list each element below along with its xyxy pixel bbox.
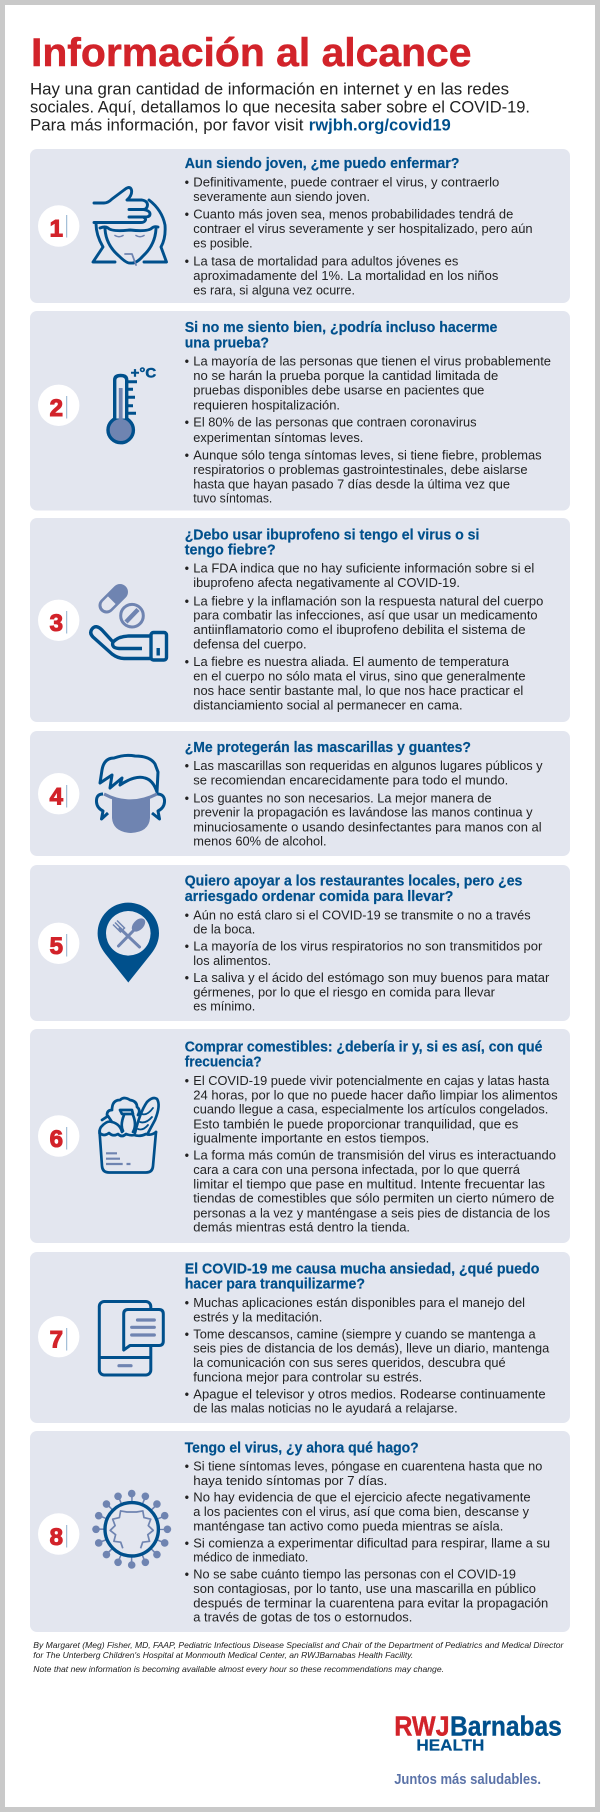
bullet list 8: • [185,1567,189,1581]
panel: card 1 young people [30,149,570,303]
bullet list 6: limitar el tiempo que pase en multitud. Intente frecuentar las [193,1177,545,1191]
bullet list 6: Esto también le puede proporcionar tranquilidad, que es [193,1117,518,1131]
bullet list 3: • [185,655,189,669]
bullet list 1: es rara, si alguna vez ocurre. [193,284,355,298]
heading 6 [185,1039,542,1071]
icon: thermometer: +°C [131,365,156,380]
bullet list 6: cara a cara con una persona infectada, por lo que querrá [193,1163,520,1177]
title: Información al alcance [31,31,472,75]
bullet list 2: pruebas disponibles debe usarse en pacientes que [193,384,484,398]
bullet list 2 [185,354,551,506]
heading 1: Aun siendo joven, ¿me puedo enfermar? [185,156,459,172]
number badge 4 [38,773,79,814]
bullet list 6: 24 horas, por lo que no puede hacer daño limpiar los alimentos [193,1088,558,1102]
intro text block [30,79,530,134]
footnote credits: Note that new information is becoming available almost every hour so these recommendations may change. [33,1664,444,1674]
heading 5: Quiero apoyar a los restaurantes locales, pero ¿es [185,874,522,890]
panel: card 4 masks and gloves [30,731,570,856]
bullet list 5: La mayoría de los virus respiratorios no son transmitidos por [193,940,542,954]
bullet list 4: Las mascarillas son requeridas en algunos lugares públicos y [193,759,543,773]
bullet list 2: tuvo síntomas. [193,492,272,506]
bullet list 8: Si tiene síntomas leves, póngase en cuarentena hasta que no [193,1460,542,1474]
bullet list 5: La saliva y el ácido del estómago son muy buenos para matar [193,971,549,985]
heading 5: arriesgado ordenar comida para llevar? [185,889,453,905]
bullet list 8: a través de gotas de tos o estornudos. [193,1611,412,1625]
bullet list 2: no se harán la prueba porque la cantidad limitada de [193,369,498,383]
bullet list 6: igualmente importante en estos tiempos. [193,1132,429,1146]
heading 3: tengo fiebre? [185,543,276,559]
panel: card 3 ibuprofen [30,518,570,722]
bullet list 7: de las malas noticias no le ayudará a relajarse. [193,1402,458,1416]
bullet list 3 [185,561,543,712]
bullet list 2: • [185,448,189,462]
number badge 1 [38,205,79,247]
bullet list 3: antiinflamatorio como el ibuprofeno debilita el sistema de [193,623,526,637]
bullet list 7: • [185,1296,189,1310]
bullet list 2: El 80% de las personas que contraen coronavirus [193,416,477,430]
bullet list 8: médico de inmediato. [193,1551,308,1565]
bullet list 5: gérmenes, por lo que el riesgo en comida para llevar [193,985,495,999]
bullet list 3: para combatir las infecciones, así que usar un medicamento [193,609,538,623]
bullet list 1: • [185,207,189,221]
bullet list 2: La mayoría de las personas que tienen el virus probablemente [193,354,551,368]
bullet list 1: Definitivamente, puede contraer el virus, y contraerlo [193,175,499,189]
panel: card 7 anxiety [30,1252,570,1423]
footnote credits: By Margaret (Meg) Fisher, MD, FAAP, Pediatric Infectious Disease Specialist and Chair of the Department of Pediatrics and Medical Director [33,1640,565,1650]
icon: virus [92,1490,171,1569]
number badge 7 [38,1316,79,1357]
heading 6: frecuencia? [185,1055,262,1071]
bullet list 4: Los guantes no son necesarios. La mejor manera de [193,791,492,805]
bullet list 5: es mínimo. [193,1000,255,1014]
bullet list 8: haya tenido síntomas por 7 días. [193,1474,387,1488]
bullet list 6: • [185,1074,189,1088]
bullet list 6: La forma más común de transmisión del virus es interactuando [193,1148,556,1162]
bullet list 8: No se sabe cuánto tiempo las personas con el COVID-19 [193,1567,516,1581]
bullet list 3: distanciamiento social al permanecer en cama. [193,698,463,712]
panel: card 5 takeout food [30,865,570,1021]
bullet list 3: defensa del cuerpo. [193,637,307,651]
intro text block: rwjbh.org/covid19 [309,115,451,134]
bullet list 7: la comunicación con sus seres queridos, descubra qué [193,1356,506,1370]
bullet list 6: personas a la vez y manténgase a seis pies de distancia de los [193,1206,550,1220]
bullet list 2: • [185,416,189,430]
bullet list 2: Aunque sólo tenga síntomas leves, si tiene fiebre, problemas [193,448,542,462]
bullet list 7 [185,1296,549,1416]
bullet list 4 [185,759,543,849]
bullet list 6: tiendas de comestibles que sólo permiten un cierto número de [193,1192,554,1206]
bullet list 5: • [185,971,189,985]
bullet list 7: seis pies de distancia de los demás), lleve un diario, mantenga [193,1342,549,1356]
bullet list 2: • [185,354,189,368]
bullet list 5 [185,908,549,1014]
icon: thermometer [108,365,156,443]
bullet list 8: Si comienza a experimentar dificultad para respirar, llame a su [193,1536,550,1550]
intro text block: Hay una gran cantidad de información en internet y en las redes [30,79,509,98]
bullet list 8: después de terminar la cuarentena para evitar la propagación [193,1596,548,1610]
number badge 1: 1 [50,216,63,242]
bullet list 8: • [185,1491,189,1505]
bullet list 3: nos hace sentir bastante mal, lo que nos hace practicar el [193,684,523,698]
intro text block: sociales. Aquí, detallamos lo que necesita saber sobre el COVID-19. [30,97,530,116]
bullet list 1: contraer el virus severamente y ser hospitalizado, pero aún [193,222,533,236]
bullet list 1: severamente aun siendo joven. [193,190,370,204]
bullet list 8: • [185,1536,189,1550]
number badge 2: 2 [50,395,63,422]
panel: card 8 have the virus [30,1431,570,1632]
bullet list 7: Tome descansos, camine (siempre y cuando se mantenga a [193,1327,536,1341]
bullet list 4: • [185,791,189,805]
bullet list 7: Muchas aplicaciones están disponibles para el manejo del [193,1296,525,1310]
bullet list 6: cuando llegue a casa, especialmente los artículos congelados. [193,1103,548,1117]
bullet list 6: • [185,1148,189,1162]
heading 3: ¿Debo usar ibuprofeno si tengo el virus o si [185,527,479,543]
heading 3 [185,527,479,559]
footnote credits [33,1640,565,1674]
heading 7 [185,1261,539,1293]
bullet list 7: funciona mejor para controlar su estrés. [193,1370,422,1384]
bullet list 3: en el cuerpo no sólo mata el virus, sino que generalmente [193,669,526,683]
bullet list 7: • [185,1327,189,1341]
logo: RWJBarnabas Health: HEALTH [416,1738,484,1755]
icon: phone with message bubble [99,1302,163,1375]
bullet list 6: El COVID-19 puede vivir potencialmente en cajas y latas hasta [193,1074,549,1088]
bullet list 1: • [185,254,189,268]
number badge 5 [38,923,79,964]
bullet list 3: • [185,561,189,575]
bullet list 8: • [185,1460,189,1474]
icon: face with mask [96,755,165,833]
heading 4: ¿Me protegerán las mascarillas y guantes? [185,740,471,756]
bullet list 3: La FDA indica que no hay suficiente información sobre si el [193,561,534,575]
bullet list 5: Aún no está claro si el COVID-19 se transmite o no a través [193,908,531,922]
tagline: Juntos más saludables. [394,1772,541,1788]
icon: grocery bag [100,1098,159,1172]
bullet list 7: estrés y la meditación. [193,1310,322,1324]
bullet list 4: • [185,759,189,773]
panel: card 6 groceries [30,1029,570,1243]
icon: sick person with hand on forehead [93,188,166,265]
icon: location pin with fork and spoon [98,903,159,982]
icon: pill over open hand [91,592,166,660]
number badge 5: 5 [50,933,63,960]
bullet list 7: • [185,1387,189,1401]
bullet list 8 [185,1460,550,1625]
bullet list 3: La fiebre y la inflamación son la respuesta natural del cuerpo [193,594,543,608]
number badge 7: 7 [50,1326,63,1354]
heading 2 [185,320,497,351]
bullet list 1: aproximadamente del 1%. La mortalidad en los niños [193,269,498,283]
heading 8: Tengo el virus, ¿y ahora qué hago? [185,1441,419,1457]
bullet list 1: La tasa de mortalidad para adultos jóvenes es [193,254,458,268]
bullet list 6 [185,1074,558,1235]
bullet list 8: son contagiosas, por lo tanto, use una mascarilla en público [193,1582,536,1596]
bullet list 7: Apague el televisor y otros medios. Rodearse continuamente [193,1387,546,1401]
number badge 6 [38,1115,79,1157]
logo: RWJBarnabas Health: Barnabas [450,1711,562,1742]
heading 6: Comprar comestibles: ¿debería ir y, si es así, con qué [185,1039,542,1055]
bullet list 1: es posible. [193,237,253,251]
bullet list 4: prevenir la propagación es lavándose las manos continua y [193,806,533,820]
number badge 3 [38,600,79,641]
number badge 8: 8 [50,1524,63,1551]
number badge 6: 6 [50,1126,63,1153]
bullet list 6: demás mientras está dentro la tienda. [193,1221,410,1235]
bullet list 2: experimentan síntomas leves. [193,431,363,445]
bullet list 4: se recomiendan encarecidamente para todo el mundo. [193,774,508,788]
heading 7: El COVID-19 me causa mucha ansiedad, ¿qué puedo [185,1261,539,1277]
number badge 3: 3 [50,610,63,637]
heading 2: una prueba? [185,335,269,351]
bullet list 1 [185,175,533,298]
panel: card 2 testing [30,311,570,510]
bullet list 5: • [185,908,189,922]
heading 5 [185,874,522,905]
bullet list 1: • [185,175,189,189]
bullet list 8: a los pacientes con el virus, así que coma bien, descanse y [193,1505,530,1519]
intro text block: Para más información, por favor visit [30,115,304,134]
bullet list 2: hasta que hayan pasado 7 días desde la última vez que [193,477,510,491]
bullet list 3: • [185,594,189,608]
bullet list 2: respiratorios o problemas gastrointestinales, debe aislarse [193,463,528,477]
bullet list 4: menos 60% de alcohol. [193,835,327,849]
footnote credits: for The Unterberg Children's Hospital at Monmouth Medical Center, an RWJBarnabas Health Facility. [33,1650,413,1660]
bullet list 8: No hay evidencia de que el ejercicio afecte negativamente [193,1491,531,1505]
bullet list 3: La fiebre es nuestra aliada. El aumento de temperatura [193,655,509,669]
logo: RWJBarnabas Health [394,1711,562,1755]
logo: RWJBarnabas Health: RWJ [394,1711,450,1742]
bullet list 5: los alimentos. [193,954,271,968]
bullet list 2: requieren hospitalización. [193,398,340,412]
bullet list 1: Cuanto más joven sea, menos probabilidades tendrá de [193,207,513,221]
number badge 4: 4 [50,784,64,810]
bullet list 4: minuciosamente o usando desinfectantes para manos con al [193,820,542,834]
bullet list 3: ibuprofeno afecta negativamente al COVID-19. [193,576,460,590]
heading 2: Si no me siento bien, ¿podría incluso hacerme [185,320,497,336]
bullet list 5: de la boca. [193,923,255,937]
heading 7: hacer para tranquilizarme? [185,1277,365,1293]
number badge 2 [38,385,79,426]
bullet list 8: manténgase tan activo como pueda mientras se aísla. [193,1520,503,1534]
bullet list 5: • [185,940,189,954]
number badge 8 [38,1513,79,1555]
